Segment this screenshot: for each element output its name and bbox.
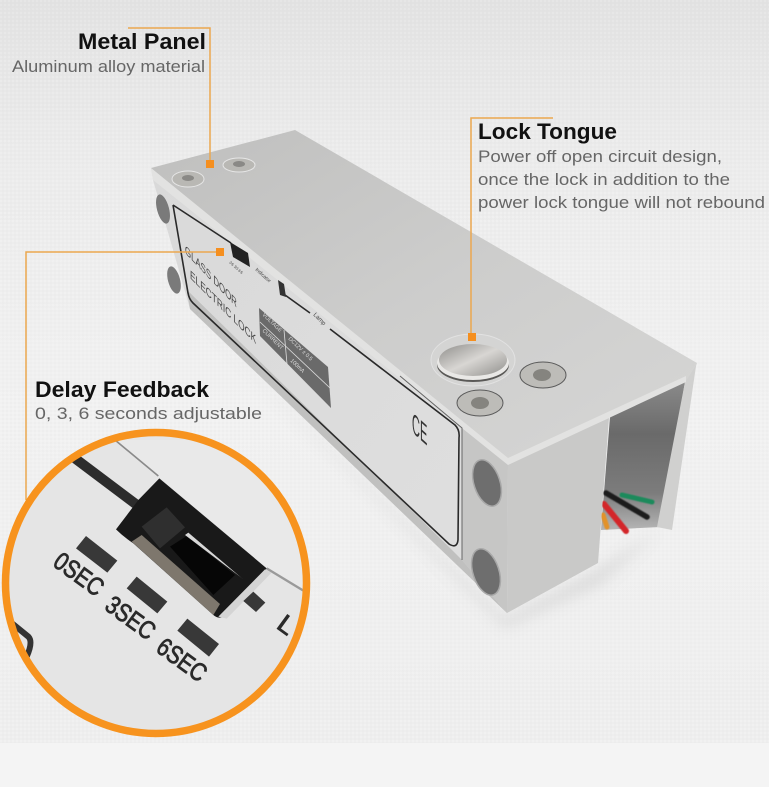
screws	[172, 158, 566, 416]
heading: delay feedback	[35, 377, 262, 423]
switch labels: 0SEC	[48, 547, 109, 602]
magnified circle: delay switch	[6, 432, 320, 734]
plate text: ELECTRIC LOCK	[190, 267, 256, 347]
spec table: 100mA	[289, 358, 306, 375]
heading: metal panel: Metal Panel	[78, 29, 206, 54]
spec table: DC12V ± 0.5	[287, 336, 313, 362]
label plate outline	[173, 205, 459, 546]
top face	[151, 130, 697, 463]
switch labels: 3SEC	[100, 591, 161, 646]
wires	[603, 493, 652, 531]
heading: delay feedback: Delay Feedback	[35, 377, 210, 402]
plate text: Indicator	[254, 267, 272, 285]
spec table	[259, 308, 331, 408]
product: electric lock body	[151, 130, 697, 628]
heading: lock tongue	[478, 119, 765, 212]
black line	[75, 458, 138, 506]
plate text: 0S 3S 6S	[228, 260, 244, 275]
lock tongue button	[431, 334, 515, 386]
upper surface	[115, 440, 320, 597]
end holes	[153, 193, 507, 599]
heading: metal panel: Aluminum alloy material	[12, 57, 205, 76]
callout line: metal panel	[128, 28, 214, 168]
heading: delay feedback: 0, 3, 6 seconds adjustable	[35, 404, 262, 423]
plate text: GLASS DOOR	[185, 242, 237, 311]
indicator bars	[76, 536, 265, 657]
callout line: delay feedback	[26, 248, 224, 500]
plate text	[185, 242, 327, 347]
lamp window	[278, 280, 286, 297]
right arm of channel	[657, 363, 697, 530]
switch	[230, 242, 250, 267]
heading: metal panel	[12, 29, 206, 76]
switch recess	[116, 478, 267, 618]
spec table: CURRENT	[261, 328, 285, 352]
switch labels: 6SEC	[151, 633, 212, 688]
switch labels: L	[272, 610, 300, 641]
CE mark: CE	[412, 406, 427, 452]
end face	[507, 418, 609, 613]
label face	[151, 168, 508, 613]
lower edge strip	[187, 290, 507, 613]
corner mark	[10, 622, 30, 657]
spec table: VOLTAGE	[261, 312, 283, 334]
heading: lock tongue: Lock Tongue	[478, 119, 617, 144]
heading: lock tongue: power lock tongue will not rebound	[478, 193, 765, 212]
heading: lock tongue: Power off open circuit design,	[478, 147, 722, 166]
inner channel	[601, 382, 685, 530]
plate text: Lamp	[312, 312, 327, 327]
callout line: lock tongue	[468, 118, 553, 341]
switch labels	[48, 547, 300, 688]
heading: lock tongue: once the lock in addition to the	[478, 170, 730, 189]
